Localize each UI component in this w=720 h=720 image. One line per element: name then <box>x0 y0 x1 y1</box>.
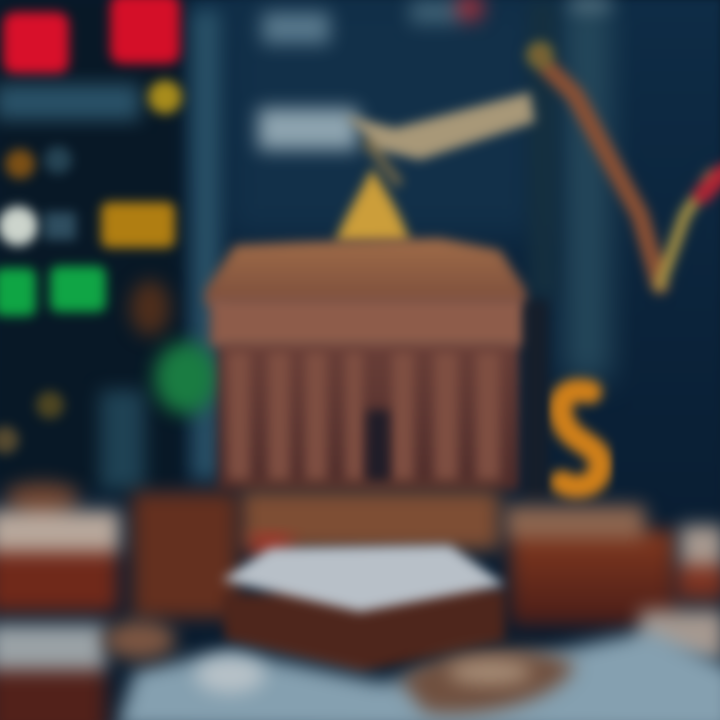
left lower block <box>0 624 106 720</box>
top screen labels <box>258 0 610 150</box>
far right stack <box>640 525 720 660</box>
papers foreground <box>0 620 720 720</box>
building <box>205 168 526 490</box>
white dot <box>0 206 38 246</box>
doorway <box>367 410 389 482</box>
green orb <box>154 342 218 414</box>
green ticker blocks <box>0 266 106 316</box>
left tall block <box>132 492 238 618</box>
brown dot <box>130 280 170 336</box>
yellow dot <box>148 80 182 114</box>
left ticker panel <box>0 0 218 454</box>
amber block <box>101 202 175 248</box>
grey bar <box>44 212 76 240</box>
red ticker blocks <box>3 0 180 74</box>
columns <box>228 352 500 480</box>
small gold dots <box>36 391 64 419</box>
right dark pillar <box>524 300 548 500</box>
white highlight <box>195 657 265 693</box>
entablature <box>210 298 526 346</box>
grey dot <box>44 146 72 174</box>
back row of blocks <box>240 490 500 550</box>
chart line: red and orange falling then rising <box>531 46 720 285</box>
red accent <box>250 535 290 555</box>
left stack <box>0 482 120 612</box>
gold dome <box>335 168 410 242</box>
orange dot <box>5 149 35 179</box>
pale blue paper spread <box>115 630 720 720</box>
blue ticker row <box>0 84 140 120</box>
central block <box>222 545 505 672</box>
tan paper left <box>104 620 176 660</box>
roof <box>205 238 526 305</box>
icon: orange dollar sign <box>561 391 601 487</box>
gold bars and blocks foreground <box>0 482 720 672</box>
tan paper right <box>400 649 575 714</box>
right block <box>505 505 675 625</box>
column hall <box>218 340 520 490</box>
scale arm <box>345 92 535 185</box>
